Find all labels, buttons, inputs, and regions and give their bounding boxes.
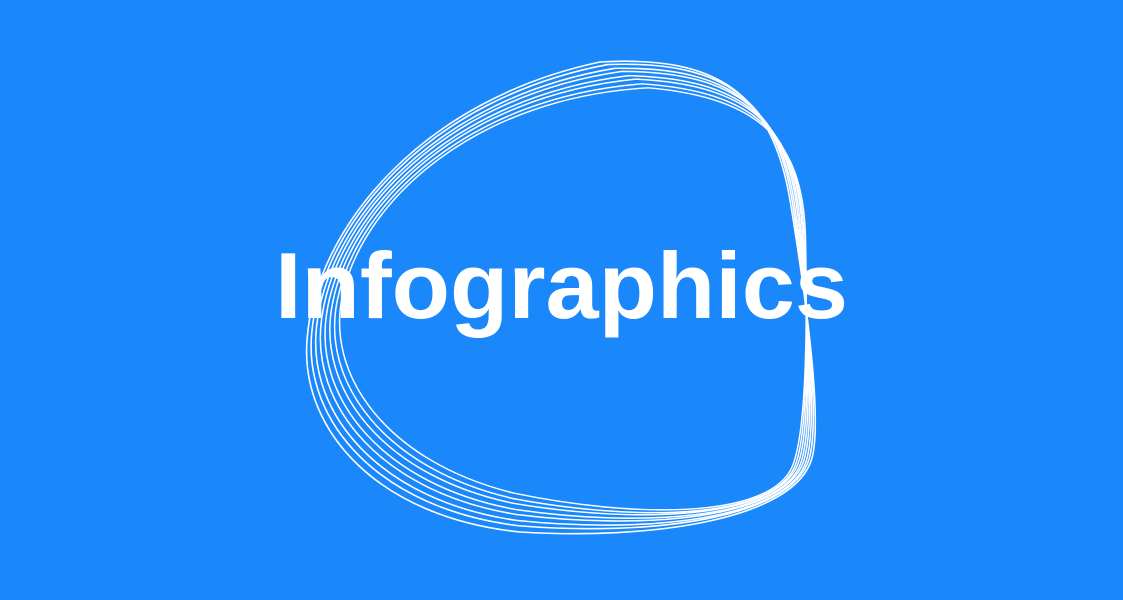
- decorative ring lines: [307, 47, 847, 535]
- title: Infographics: [275, 233, 848, 338]
